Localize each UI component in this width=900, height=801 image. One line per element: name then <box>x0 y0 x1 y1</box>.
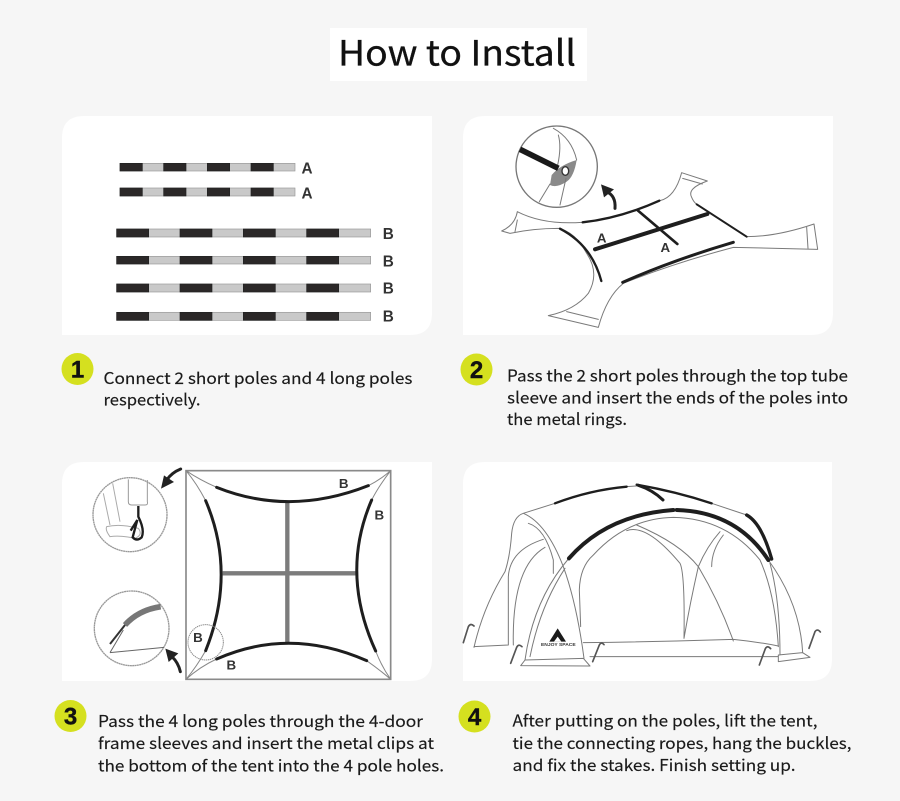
text: step 1 <box>104 365 412 410</box>
badge: step 2 <box>460 354 492 386</box>
long pole B, second: B <box>383 254 394 271</box>
text: step 3: frame sleeves and insert the metal clips at <box>98 730 434 754</box>
badge: step 3: 3 <box>64 704 77 730</box>
panel: step 3 top view with long poles <box>62 462 432 681</box>
badge: step 1: 1 <box>71 356 84 384</box>
title: How to Install <box>338 26 576 76</box>
panel: step 2 flat canopy with short poles <box>463 116 833 335</box>
text: step 4 <box>512 708 852 776</box>
short and long poles <box>583 201 659 222</box>
arrow <box>601 184 615 208</box>
badge: step 2: 2 <box>470 357 483 384</box>
long pole B, second <box>117 254 394 271</box>
icon: detail circle <box>516 126 597 207</box>
long pole B, third: B <box>383 280 394 297</box>
text: step 2 <box>507 362 848 430</box>
text: step 2: Pass the 2 short poles through the top tube <box>507 362 848 386</box>
canopy outline <box>502 173 818 327</box>
badge: step 1 <box>62 353 94 385</box>
short pole A, second: A <box>301 186 313 203</box>
icon: pole hole detail <box>94 591 169 666</box>
arrow <box>165 649 180 672</box>
text: step 3: Pass the 4 long poles through the 4-door <box>98 708 424 732</box>
stakes <box>463 624 820 665</box>
pole labels: B <box>375 508 385 523</box>
pole labels: B <box>227 658 237 673</box>
pole labels: B <box>339 476 349 491</box>
pole labels: B <box>193 630 203 645</box>
pole labels <box>597 231 671 255</box>
panel: step 4 assembled tent <box>463 462 832 681</box>
short pole A, first <box>120 160 313 177</box>
cross sleeves <box>223 503 356 643</box>
text: step 3 <box>98 708 444 776</box>
square frame <box>186 471 391 679</box>
black poles <box>555 485 772 560</box>
badge: step 4 <box>458 700 490 732</box>
badge: step 4: 4 <box>468 704 482 731</box>
long pole B, first: B <box>383 226 394 243</box>
panel: step 1 poles <box>62 116 432 335</box>
dashed highlight circle <box>188 625 223 660</box>
long pole B, fourth: B <box>383 308 394 325</box>
text: step 4: tie the connecting ropes, hang the buckles, <box>512 730 852 754</box>
pole labels: A <box>661 240 671 255</box>
text: step 3: the bottom of the tent into the 4 pole holes. <box>98 752 444 776</box>
long pole B, third <box>117 280 394 297</box>
tent structure lines <box>474 486 810 666</box>
logo: ENJOY SPACE <box>541 642 576 647</box>
short pole A, first: A <box>301 160 313 177</box>
long pole B, fourth <box>117 308 394 325</box>
short pole A, second <box>120 186 313 203</box>
long poles <box>206 486 376 661</box>
text: step 1: respectively. <box>104 386 200 410</box>
icon: buckle hook detail <box>93 478 167 552</box>
pole labels: A <box>597 231 607 246</box>
logo <box>541 628 576 647</box>
text: step 4: and fix the stakes. Finish setting up. <box>512 752 796 776</box>
text: step 1: Connect 2 short poles and 4 long poles <box>104 365 412 389</box>
pole labels <box>193 476 385 673</box>
long pole B, first <box>117 226 394 243</box>
badge: step 3 <box>54 700 86 732</box>
text: step 2: the metal rings. <box>507 406 627 430</box>
arrow <box>161 469 181 489</box>
text: step 4: After putting on the poles, lift the tent, <box>512 708 818 732</box>
text: step 2: sleeve and insert the ends of the poles into <box>507 384 848 408</box>
